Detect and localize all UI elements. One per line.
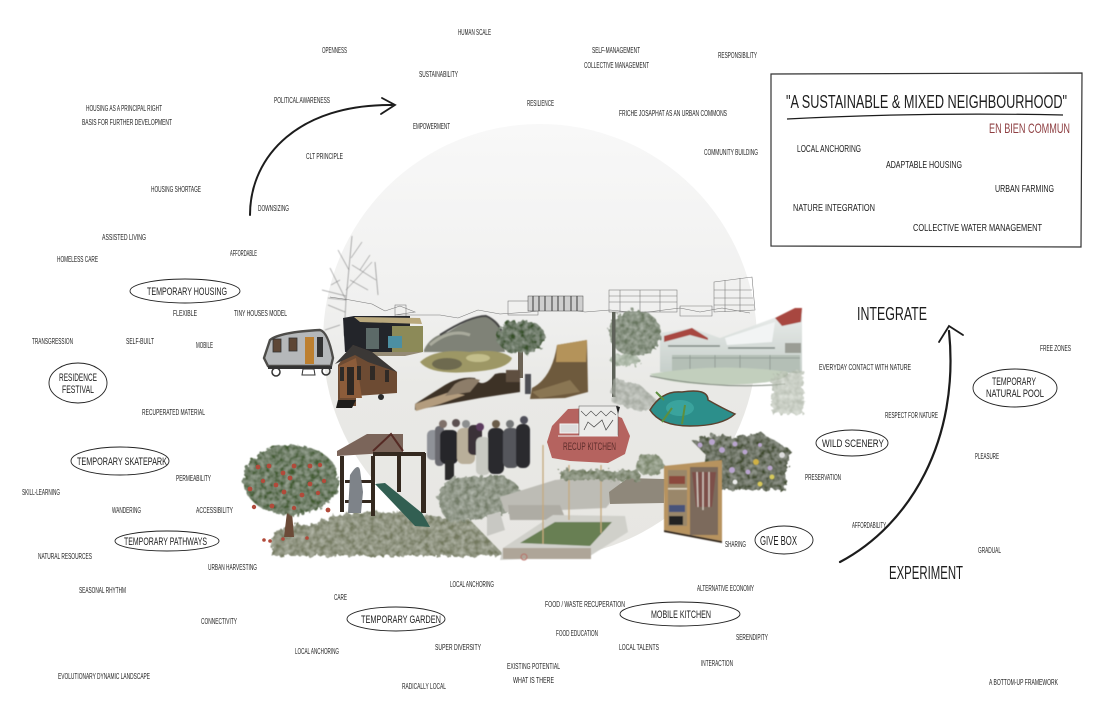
panel item: URBAN FARMING	[995, 183, 1054, 195]
keyword: TRANSGRESSION	[32, 337, 73, 346]
arrow: experiment to integrate	[840, 326, 963, 562]
keyword: PERMEABILITY	[176, 474, 211, 483]
keyword: AFFORDABLE	[230, 249, 257, 258]
keyword: GRADUAL	[978, 546, 1001, 555]
tree trunk	[612, 312, 616, 397]
foliage: playground ground	[272, 511, 505, 556]
oval label: temporary garden: TEMPORARY GARDEN	[361, 614, 441, 626]
title underline	[787, 114, 1063, 119]
keyword: EVERYDAY CONTACT WITH NATURE	[819, 363, 911, 372]
oval label: residence festival: FESTIVAL	[62, 384, 94, 396]
keyword: SELF-BUILT	[126, 337, 154, 346]
building complex	[650, 308, 802, 386]
oval label: give box	[755, 526, 813, 554]
keyword: URBAN HARVESTING	[208, 563, 257, 572]
mound building	[420, 316, 512, 373]
panel item: ADAPTABLE HOUSING	[886, 159, 962, 171]
keyword: RESPONSIBILITY	[718, 51, 757, 60]
keyword: LOCAL TALENTS	[619, 643, 659, 652]
keyword: CARE	[334, 593, 347, 602]
keyword: WHAT IS THERE	[513, 676, 554, 685]
raised beds	[487, 445, 628, 560]
oval label: temporary skatepark: TEMPORARY SKATEPARK	[77, 456, 167, 468]
keyword: CLT PRINCIPLE	[306, 152, 343, 161]
pallet bench	[609, 478, 665, 504]
foliage: small tree	[497, 320, 545, 378]
keyword: RESPECT FOR NATURE	[885, 411, 938, 420]
flower meadow	[693, 433, 790, 490]
keyword: SKILL-LEARNING	[22, 488, 60, 497]
plants: around pond	[612, 370, 804, 414]
heading: experiment: EXPERIMENT	[889, 563, 963, 583]
playhouse	[337, 434, 430, 527]
keyword: FREE ZONES	[1040, 344, 1071, 353]
panel item: NATURE INTEGRATION	[793, 202, 875, 214]
keyword: HOUSING AS A PRINCIPAL RIGHT	[86, 104, 162, 113]
keyword: SUPER DIVERSITY	[435, 643, 481, 652]
keyword: SEASONAL RHYTHM	[79, 586, 126, 595]
panel: sustainable neighbourhood	[771, 73, 1082, 247]
group of people	[427, 416, 530, 480]
keyword: ACCESSIBILITY	[196, 506, 233, 515]
keyword: DOWNSIZING	[258, 204, 289, 213]
keyword: AFFORDABILITY	[852, 521, 886, 530]
panel item: COLLECTIVE WATER MANAGEMENT	[913, 222, 1042, 234]
keyword: SUSTAINABILITY	[419, 70, 458, 79]
keyword: POLITICAL AWARENESS	[274, 96, 330, 105]
keyword: MOBILE	[196, 341, 213, 350]
oval label: temporary housing	[130, 279, 240, 303]
keyword: HOMELESS CARE	[57, 255, 98, 264]
pavilion	[343, 316, 423, 356]
keyword: RECUPERATED MATERIAL	[142, 408, 205, 417]
apple tree	[243, 445, 339, 543]
foliage: courtyard tree	[609, 310, 661, 366]
oval label: temporary housing: TEMPORARY HOUSING	[147, 286, 227, 298]
recup kitchen sign: RECUP KITCHEN	[563, 441, 616, 453]
oval label: temporary pathways	[115, 531, 219, 551]
collage: central scene	[243, 236, 804, 560]
keyword: HOUSING SHORTAGE	[151, 185, 201, 194]
keyword: HUMAN SCALE	[458, 28, 491, 37]
keyword: FLEXIBLE	[173, 309, 197, 318]
keyword: COMMUNITY BUILDING	[704, 148, 758, 157]
arrow: top-left curve	[250, 98, 395, 215]
oval label: temporary natural pool: TEMPORARY	[992, 376, 1036, 388]
keyword: FOOD EDUCATION	[556, 629, 598, 638]
panel frame	[771, 73, 1082, 247]
foliage: bush behind pallet	[560, 454, 664, 480]
keyword: RESILIENCE	[527, 99, 554, 108]
oval label: mobile kitchen: MOBILE KITCHEN	[651, 609, 711, 621]
keyword: BASIS FOR FURTHER DEVELOPMENT	[82, 118, 172, 127]
keyword: LOCAL ANCHORING	[450, 580, 494, 589]
caravan	[264, 330, 333, 376]
keyword: INTERACTION	[701, 659, 733, 668]
keyword: FOOD / WASTE RECUPERATION	[545, 600, 625, 609]
keyword: PLEASURE	[975, 452, 999, 461]
tiny house	[335, 345, 397, 408]
wooden pallet ramp	[530, 340, 588, 399]
keyword: CONNECTIVITY	[201, 617, 237, 626]
keyword: SERENDIPITY	[736, 633, 768, 642]
sketch: bare tree	[322, 236, 378, 336]
keyword: PRESERVATION	[805, 473, 841, 482]
recup kitchen sign	[547, 406, 630, 463]
keyword: EXISTING POTENTIAL	[507, 662, 560, 671]
oval label: give box: GIVE BOX	[760, 533, 797, 548]
keyword: EMPOWERMENT	[413, 122, 450, 131]
sketch: dark tower block	[528, 296, 583, 311]
sketch: skyline	[330, 277, 755, 318]
oval label: temporary pathways: TEMPORARY PATHWAYS	[124, 536, 207, 548]
skate ramp low	[415, 370, 531, 411]
keyword: RADICALLY LOCAL	[402, 682, 446, 691]
give box wardrobe	[664, 460, 722, 543]
keyword: ALTERNATIVE ECONOMY	[697, 584, 754, 593]
oval label: wild scenery: WILD SCENERY	[822, 438, 884, 450]
keyword: A BOTTOM-UP FRAMEWORK	[989, 678, 1058, 687]
keyword: LOCAL ANCHORING	[295, 647, 339, 656]
oval label: temporary garden	[347, 607, 445, 631]
keyword: ASSISTED LIVING	[102, 233, 146, 242]
keyword: SHARING	[725, 540, 746, 549]
keyword: EVOLUTIONARY DYNAMIC LANDSCAPE	[58, 672, 150, 681]
oval label: temporary skatepark	[71, 447, 169, 475]
keyword: NATURAL RESOURCES	[38, 552, 92, 561]
foliage: garden plants	[439, 475, 520, 522]
panel item: LOCAL ANCHORING	[797, 143, 861, 155]
heading: integrate: INTEGRATE	[857, 304, 927, 324]
oval label: temporary natural pool	[973, 369, 1057, 407]
oval label: temporary natural pool: NATURAL POOL	[986, 388, 1044, 400]
oval label: residence festival: RESIDENCE	[59, 372, 97, 384]
keyword: OPENNESS	[322, 46, 347, 55]
oval label: wild scenery	[816, 430, 888, 456]
keyword: COLLECTIVE MANAGEMENT	[584, 61, 649, 70]
keyword: FRICHE JOSAPHAT AS AN URBAN COMMONS	[619, 109, 727, 118]
keyword: TINY HOUSES MODEL	[234, 309, 287, 318]
oval label: mobile kitchen	[620, 602, 740, 626]
keyword: WANDERING	[112, 506, 141, 515]
central circle backdrop	[323, 124, 757, 558]
icon: pond	[650, 391, 735, 426]
keyword: SELF-MANAGEMENT	[592, 46, 640, 55]
oval label: residence festival	[49, 363, 107, 403]
